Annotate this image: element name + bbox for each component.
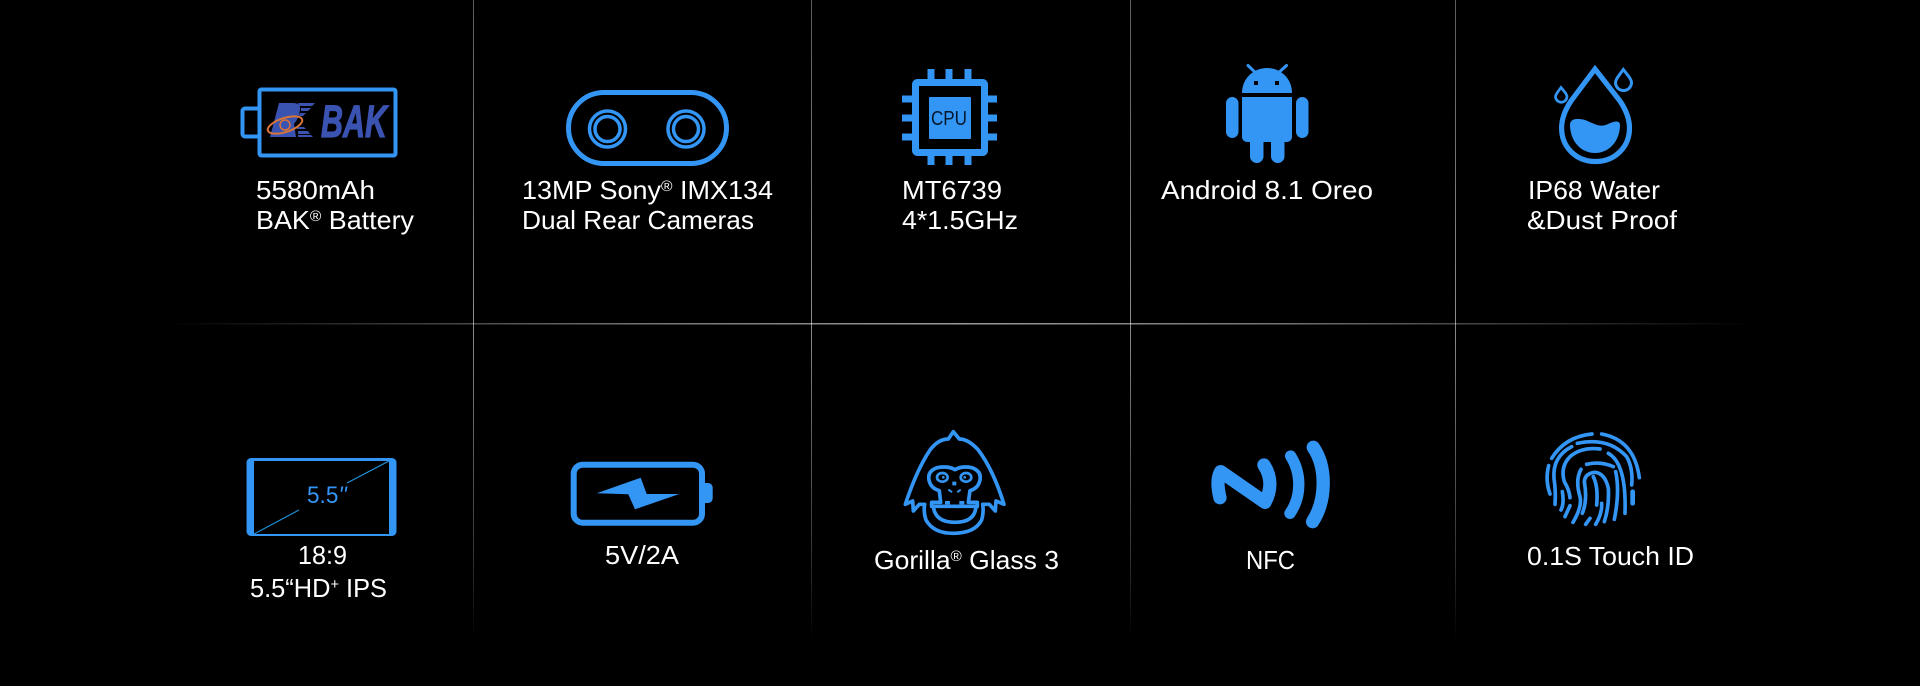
label: battery (256, 175, 414, 235)
label: processor (902, 175, 1018, 235)
icon: android robot (1226, 66, 1308, 163)
panel: water proof (1527, 69, 1678, 235)
label: water proof: &Dust Proof (1527, 205, 1678, 235)
icon: gorilla (905, 432, 1004, 533)
panel: NFC (1218, 447, 1323, 575)
label: battery: Battery (321, 205, 414, 235)
label: display (250, 540, 387, 603)
label: android: Android 8.1 Oreo (1161, 175, 1373, 205)
label: cameras: Dual Rear Cameras (522, 205, 754, 235)
label: gorilla glass: Glass 3 (962, 545, 1059, 575)
icon: phone screen (246, 458, 396, 536)
panel: android (1161, 66, 1373, 205)
label: display: 18:9 (298, 540, 347, 570)
label: processor: 4*1.5GHz (902, 205, 1018, 235)
label: battery: BAK (256, 205, 308, 235)
label: battery: ® (310, 208, 321, 225)
label: processor: MT6739 (902, 175, 1002, 205)
label: cameras: ® (661, 178, 672, 195)
panel: gorilla glass (874, 432, 1059, 575)
icon: BAK battery (242, 90, 396, 156)
panel: charging (574, 465, 713, 570)
icon: NFC waves (1218, 447, 1323, 522)
icon: phone screen: 5.5'' (307, 482, 348, 509)
panel: display (246, 458, 396, 603)
panel: battery (242, 90, 414, 235)
label: battery: 5580mAh (256, 175, 375, 205)
label: cameras: 13MP Sony (522, 175, 656, 205)
label: water proof: IP68 Water (1528, 175, 1660, 205)
label: cameras (522, 175, 773, 235)
panel: touch id (1527, 434, 1694, 571)
label: water proof (1527, 175, 1678, 235)
panel: cameras (522, 92, 773, 235)
icon: fingerprint (1547, 434, 1639, 524)
label: display: 5.5“HD (250, 573, 332, 603)
label: display: IPS (339, 573, 387, 603)
icon: dual cameras (568, 92, 726, 164)
label: charging: 5V/2A (605, 540, 680, 570)
icon: water drops (1556, 69, 1632, 162)
label: gorilla glass: Gorilla (874, 545, 949, 575)
panel: processor (902, 69, 1018, 235)
label: NFC: NFC (1246, 545, 1295, 575)
label: touch id: 0.1S Touch ID (1527, 541, 1694, 571)
icon: CPU chip: CPU (931, 108, 967, 130)
icon: CPU chip (902, 69, 997, 165)
label: display: + (330, 576, 339, 593)
label: gorilla glass: ® (951, 548, 962, 565)
icon: BAK battery: BAK (321, 96, 389, 147)
icon: charging battery (574, 465, 713, 523)
label: cameras: IMX134 (672, 175, 773, 205)
